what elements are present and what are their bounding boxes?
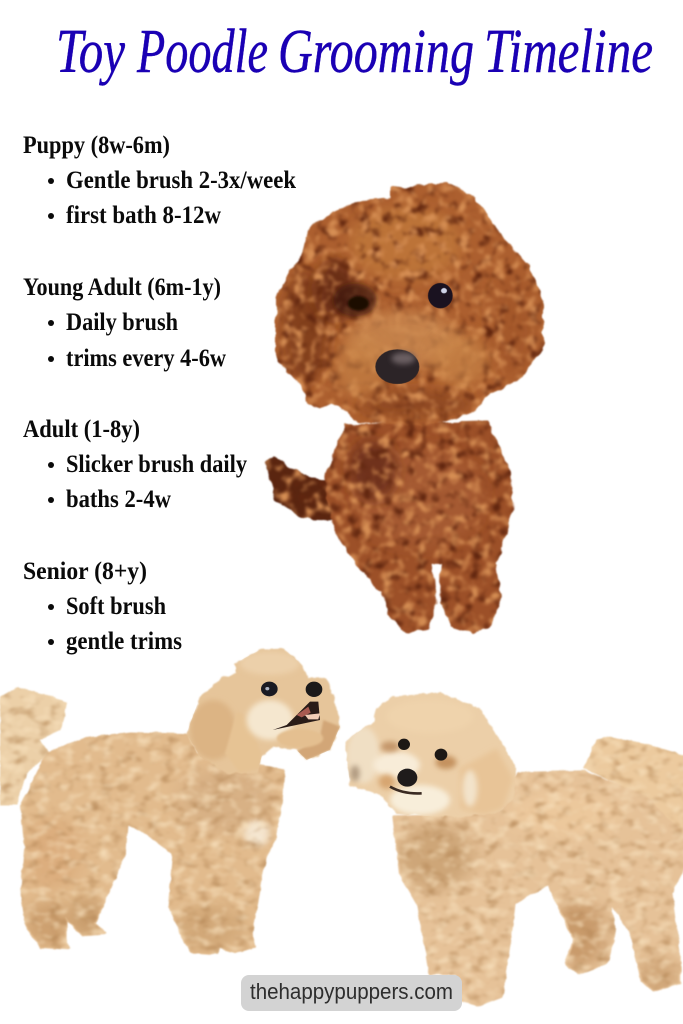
text block: senior stage: [23, 558, 182, 655]
text block: puppy stage: [23, 132, 296, 229]
text block: senior stage: Senior (8+y): [23, 558, 147, 585]
title: [56, 18, 653, 86]
title: Poodle: [136, 18, 268, 86]
text block: adult stage: baths 2-4w: [66, 486, 171, 513]
icon: cream poodle looking up: [0, 648, 340, 953]
title: Toy: [56, 18, 125, 86]
website badge: thehappypuppers.com: [250, 979, 453, 1004]
icon: right poodle nose: [397, 769, 417, 787]
text block: puppy stage: first bath 8-12w: [66, 202, 221, 229]
icon: cream poodle tilting head: [345, 692, 683, 1005]
text block: puppy stage: Puppy (8w-6m): [23, 132, 170, 159]
text block: young adult stage: Young Adult (6m-1y): [23, 274, 221, 301]
website badge: [241, 975, 462, 1011]
text block: senior stage: gentle trims: [66, 628, 182, 655]
puppy muzzle: [333, 310, 488, 397]
left poodle head: [187, 648, 340, 773]
icon: left poodle eye: [261, 682, 278, 696]
text block: adult stage: [23, 416, 247, 513]
text block: young adult stage: Daily brush: [66, 309, 178, 336]
icon: left poodle nose: [306, 682, 322, 697]
text block: adult stage: Adult (1-8y): [23, 416, 140, 443]
icon: left poodle open mouth: [273, 702, 320, 730]
text block: young adult stage: trims every 4-6w: [66, 345, 226, 372]
icon: puppy nose: [375, 349, 419, 384]
icon: right poodle mouth: [390, 787, 422, 793]
text block: adult stage: Slicker brush daily: [66, 451, 247, 478]
icon: right poodle eyes: [398, 739, 447, 761]
text block: puppy stage: Gentle brush 2-3x/week: [66, 167, 296, 194]
title: Grooming: [278, 18, 474, 86]
icon: red-brown curly puppy: [268, 185, 542, 632]
right poodle head: [345, 692, 517, 817]
icon: puppy left eye: [333, 283, 377, 317]
text block: young adult stage: [23, 274, 226, 372]
text block: senior stage: Soft brush: [66, 593, 166, 620]
icon: puppy right eye: [428, 283, 453, 308]
